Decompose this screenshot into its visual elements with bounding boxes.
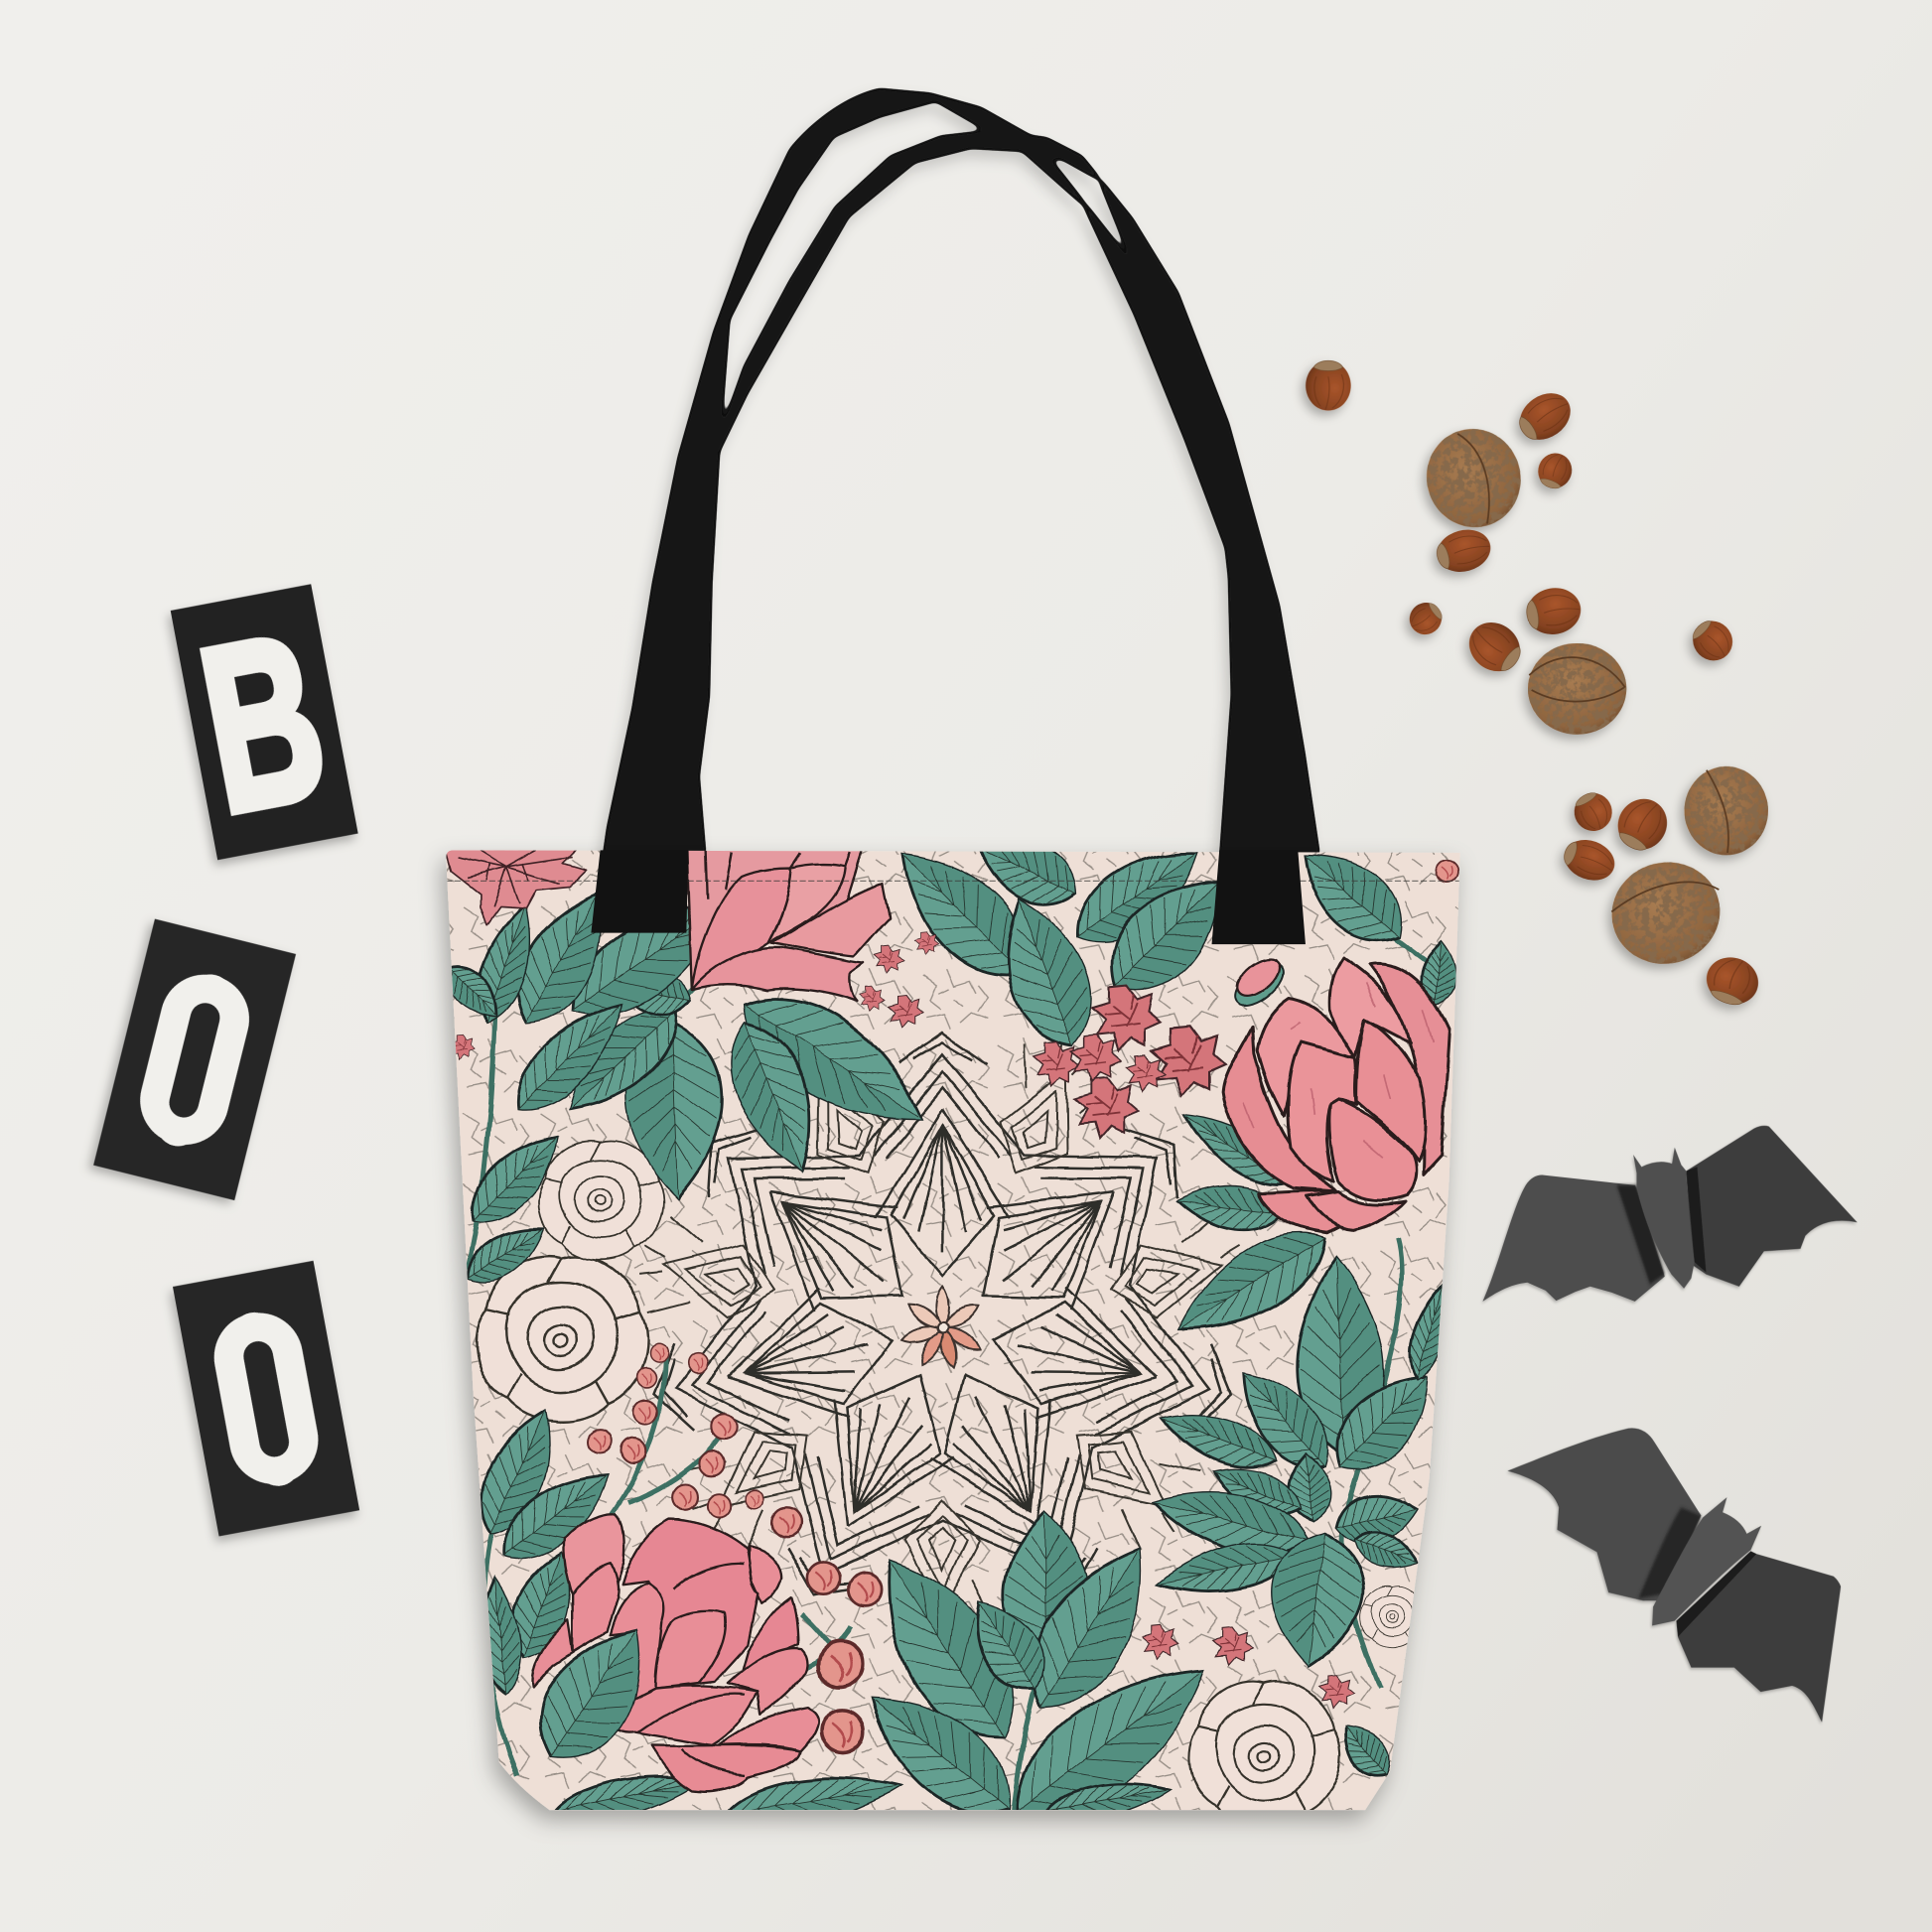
walnuts [1416,418,1768,976]
tote handles [591,87,1320,944]
letter card: O [172,1258,360,1541]
back handle [718,129,1320,856]
top bat body [1633,1148,1695,1289]
tote bag body [437,824,1472,1846]
scribble texture [438,844,1472,1818]
paper bat: top [1482,1126,1858,1302]
bottom bat body [1652,1497,1761,1626]
mandala [631,1030,1254,1636]
leaves [437,824,1457,1846]
top bat left wing [1482,1175,1665,1302]
mandala centre flower [900,1287,982,1370]
flower buds [588,862,1457,1753]
pink flower: right peony [1223,958,1449,1233]
pink tulip bud on leaf [1234,958,1285,1007]
pink flower: bottom peony [532,1514,818,1791]
line art roses [476,1141,1425,1828]
stems [469,936,1442,1810]
bottom bat right wing [1678,1554,1841,1723]
top bat right wing [1686,1126,1858,1287]
pink flower: top bloom [687,847,889,1001]
paper bat: bottom [1507,1428,1841,1723]
letter card: O: O [205,1264,328,1535]
letter card: O: O [126,924,263,1196]
scattered nuts [1306,360,1768,1012]
leaf over bottom peony [538,1628,639,1758]
red blossom cluster [450,931,1354,1708]
bottom bat left wing [1507,1428,1701,1600]
letter card: B: B [185,585,343,862]
stitch line [447,880,1459,882]
dahlia top left [444,847,586,925]
handle patches sewn on bag [591,850,1306,944]
front handle [591,87,1306,944]
hazelnuts [1306,360,1765,1012]
letter card: O [92,916,297,1205]
